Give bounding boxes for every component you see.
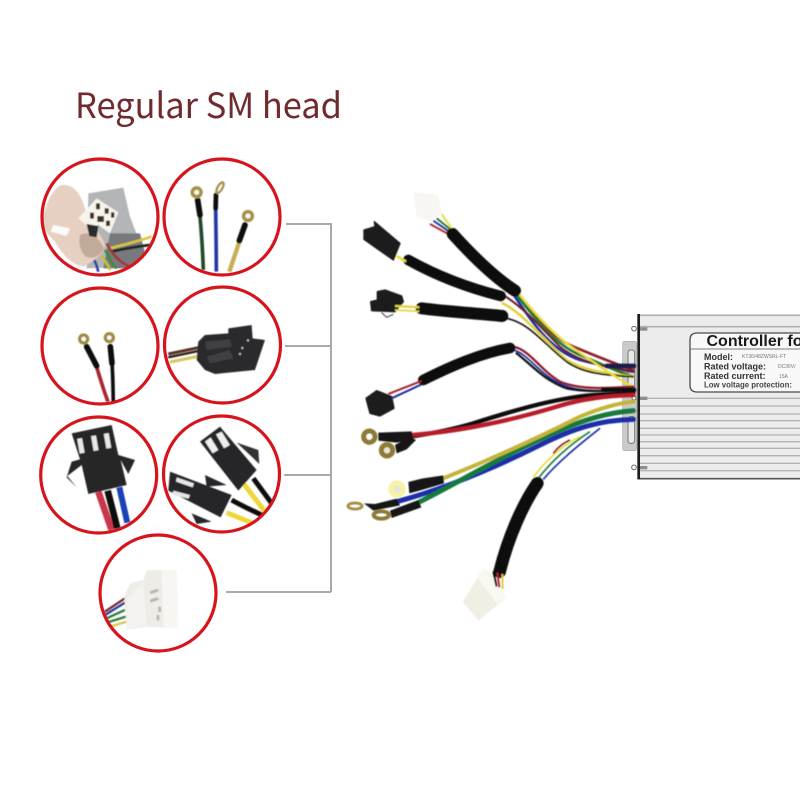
- wiring harness: upper bundles: [364, 192, 634, 416]
- black SM plug middle: [371, 290, 403, 312]
- long heat-shrink tube: [500, 483, 537, 572]
- black SM plug top: [364, 222, 400, 260]
- hall sensor wires: [533, 428, 600, 479]
- controller label plate: [690, 333, 800, 392]
- controller label plate: Low voltage protection:: [704, 380, 792, 390]
- controller label plate: Rated voltage:: [704, 362, 766, 372]
- heat-shrink tubes: [408, 234, 515, 380]
- mounting bracket: [623, 341, 637, 451]
- red circle 2: [164, 159, 280, 275]
- red circle 7: [100, 535, 216, 651]
- wires from tubes into controller: [503, 295, 634, 391]
- blue, green, yellow motor wires: [397, 419, 633, 502]
- red circle 3: [42, 288, 158, 404]
- black SM plug lower: [366, 391, 394, 416]
- icon: pair of two-pin black plugs: [168, 427, 272, 525]
- controller label plate: KT36/48ZWSRL-FT: [742, 354, 786, 360]
- white 6-pin connector (faded): [413, 192, 442, 222]
- controller box: [623, 314, 800, 479]
- red circle 5: [41, 417, 157, 533]
- black and red power wires: [397, 393, 633, 502]
- red circle 6: [164, 416, 280, 532]
- ring terminals and crimps: [364, 431, 444, 518]
- icon: white multi-pin connector: [105, 570, 178, 630]
- controller label plate: Rated current:: [704, 371, 766, 381]
- icon: three-pin black plug: [67, 425, 135, 530]
- icon: black SM plug: [168, 325, 265, 374]
- red circle 1: [42, 159, 158, 275]
- controller label plate: Controller fo: [706, 333, 800, 350]
- housing: [638, 314, 800, 479]
- controller label plate: Model:: [704, 352, 733, 362]
- red circle 4: [164, 287, 280, 403]
- icon: red and black ring terminals: [80, 334, 113, 402]
- wiring harness: lower bundles and ring terminals: [348, 393, 633, 621]
- icon: 6-pin white connector in hand: [42, 185, 152, 272]
- connector bracket lines: [226, 224, 331, 592]
- controller label plate: 15A: [779, 374, 789, 380]
- white connector at the end: [463, 568, 507, 621]
- controller label plate: DC36V/: [778, 364, 796, 370]
- title: Regular SM head: [75, 78, 342, 129]
- icon: three ring terminals: [192, 181, 252, 272]
